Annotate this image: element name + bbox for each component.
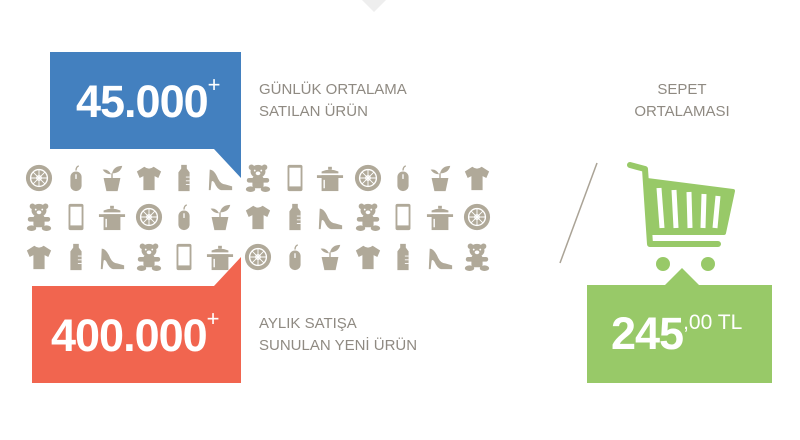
label: daily: GÜNLÜK ORTALAMA bbox=[259, 81, 407, 98]
number 400.000+: 400.000+ bbox=[51, 306, 219, 361]
number 45.000+: 45.000+ bbox=[76, 72, 220, 127]
number 245,00 TL: 245,00 TL bbox=[611, 308, 742, 359]
callout: blue daily sales bbox=[50, 52, 241, 178]
label: monthly: SUNULAN YENİ ÜRÜN bbox=[259, 337, 417, 354]
label: basket average: SEPET bbox=[657, 81, 707, 98]
label: daily bbox=[259, 81, 407, 120]
label: daily: SATILAN ÜRÜN bbox=[259, 103, 368, 120]
label: monthly: AYLIK SATIŞA bbox=[259, 315, 357, 332]
divider slash bbox=[559, 162, 598, 264]
label: basket average: ORTALAMASI bbox=[634, 103, 730, 120]
icon grid bbox=[26, 164, 490, 271]
icon: shopping cart bbox=[627, 162, 735, 271]
label: monthly bbox=[259, 315, 417, 354]
top pointer triangle bbox=[362, 0, 386, 12]
callout: red monthly new products bbox=[32, 257, 241, 383]
callout: green basket average value bbox=[587, 268, 772, 383]
label: basket average bbox=[634, 81, 730, 120]
